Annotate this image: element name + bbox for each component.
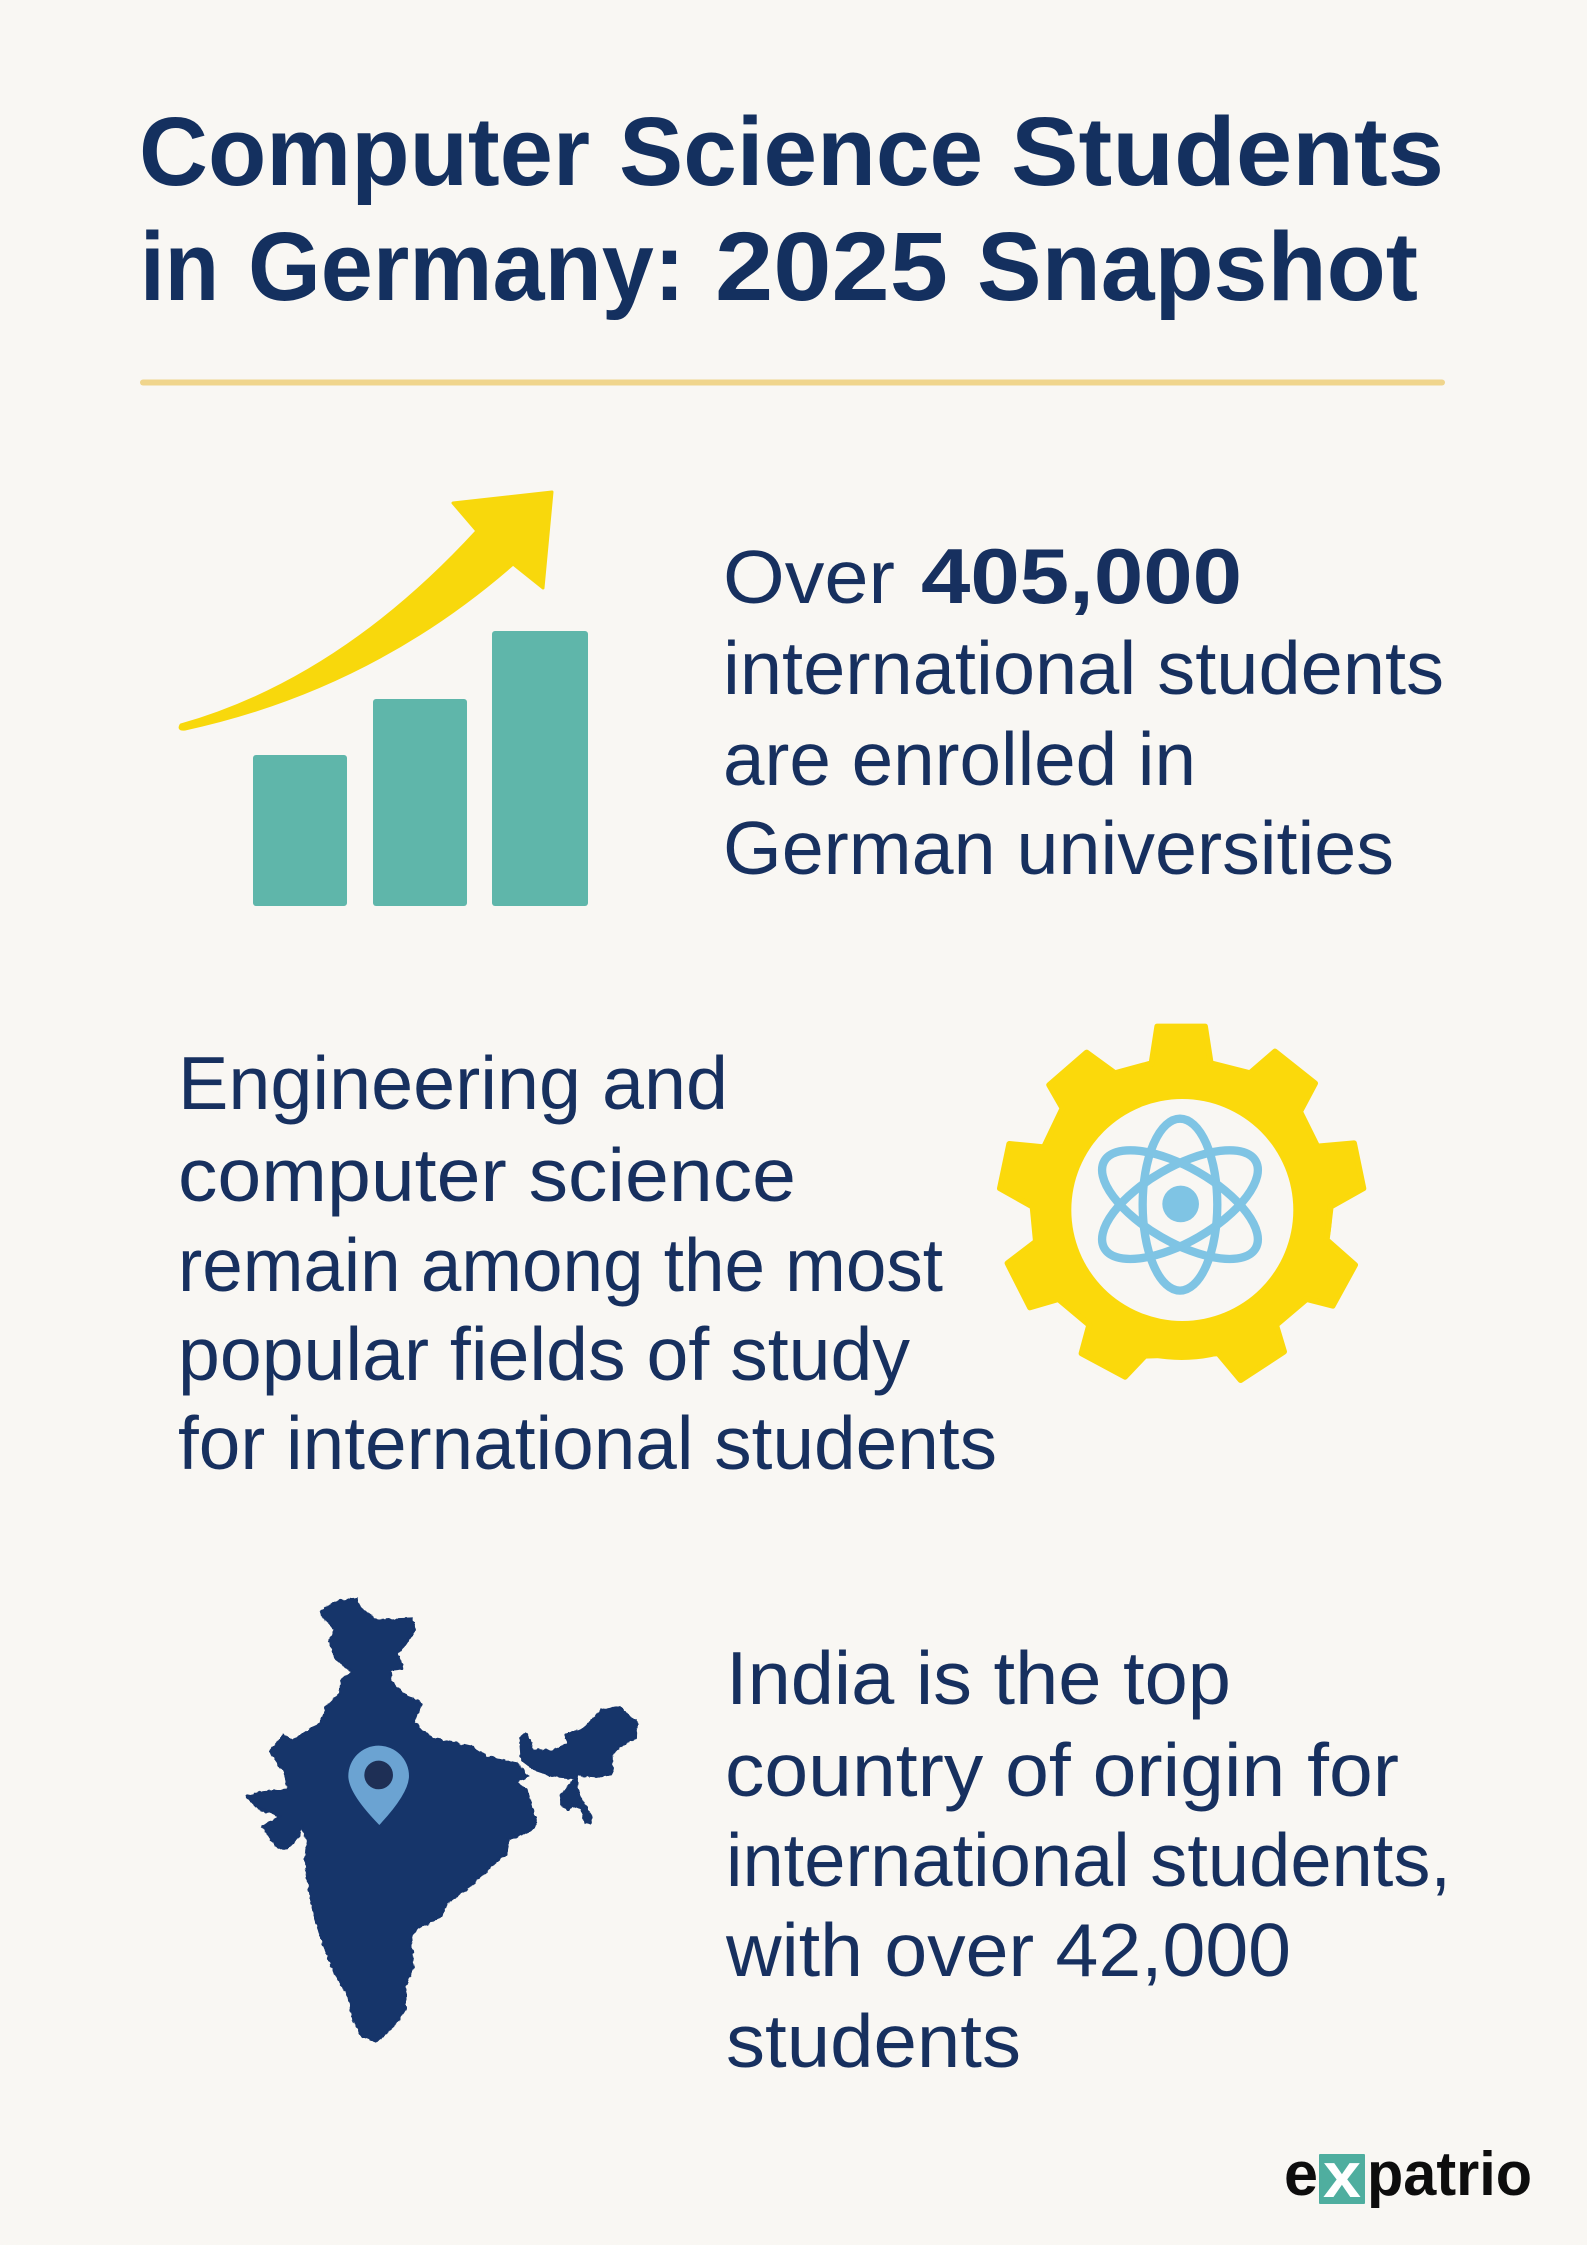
title: Snapshot	[977, 212, 1418, 321]
title: 2025	[715, 212, 948, 321]
text: India top country	[725, 1636, 1451, 2083]
text: engineering and computer science: computer science	[178, 1133, 796, 1217]
logo: expatrio: x	[1323, 2139, 1361, 2211]
title: in	[140, 212, 219, 321]
title: Science	[619, 97, 983, 206]
text: over 405,000: German universities	[723, 806, 1394, 890]
icon: map of India with pin	[247, 1598, 637, 2042]
text: over 405,000: international students	[723, 626, 1444, 710]
text: India top country: students	[726, 1999, 1021, 2083]
logo: expatrio: e	[1284, 2140, 1318, 2209]
title	[139, 97, 1444, 321]
text: India top country: India is the top	[726, 1636, 1231, 1720]
title: Germany:	[248, 212, 685, 321]
panel: international students	[180, 492, 1444, 906]
text: over 405,000: are enrolled in	[723, 717, 1196, 801]
text: engineering and computer science: Engineering and	[178, 1041, 728, 1125]
title: Students	[1011, 97, 1444, 206]
text: engineering and computer science: popular fields of study	[178, 1312, 910, 1396]
text: over 405,000: Over	[723, 535, 895, 619]
title: Computer	[139, 97, 590, 206]
text: India top country: country of origin for	[725, 1728, 1399, 1812]
text: over 405,000: 405,000	[921, 532, 1242, 620]
icon: gear with atom	[1000, 1027, 1363, 1380]
logo: expatrio	[1284, 2139, 1532, 2211]
text: engineering and computer science	[178, 1041, 997, 1485]
logo: expatrio: patrio	[1367, 2140, 1532, 2209]
icon: growth bar chart with arrow	[180, 492, 588, 906]
text: engineering and computer science: remain among the most	[178, 1223, 943, 1307]
text: India top country: with over 42,000	[725, 1908, 1291, 1992]
text: India top country: international students,	[726, 1818, 1451, 1902]
text: over 405,000	[723, 532, 1444, 890]
text: engineering and computer science: for international students	[178, 1401, 997, 1485]
panel: popular fields	[178, 1027, 1363, 1485]
panel: india	[247, 1598, 1451, 2083]
